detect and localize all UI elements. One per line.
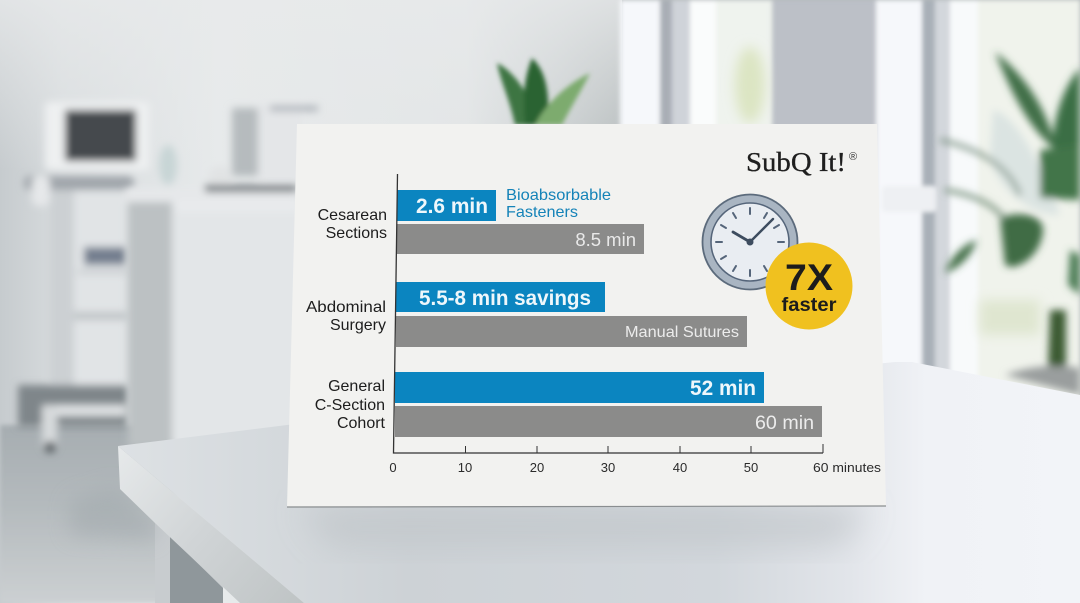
window greenery bbox=[735, 47, 1040, 335]
axis labels: 50 bbox=[744, 460, 758, 475]
axis labels: 60 minutes bbox=[813, 460, 882, 475]
axis labels: 40 bbox=[673, 460, 687, 475]
gray bar manual sutures: Manual Sutures bbox=[625, 324, 739, 341]
category label: General bbox=[328, 378, 385, 395]
gray bar 60 min bbox=[395, 406, 822, 437]
back plant bbox=[497, 58, 590, 125]
badge: 7X faster: faster bbox=[782, 295, 837, 316]
blue bar 2.6 min bbox=[397, 190, 496, 221]
table front edge bbox=[118, 446, 304, 603]
table top bbox=[118, 362, 1080, 603]
category label: Surgery bbox=[330, 317, 386, 334]
blue bar savings bbox=[396, 282, 605, 312]
axis labels bbox=[389, 460, 882, 475]
brand logo: SubQ It!: SubQ It! bbox=[746, 147, 846, 177]
axes bbox=[389, 174, 882, 475]
gray bar manual sutures bbox=[396, 316, 747, 347]
blue bar 2.6 min: 2.6 min bbox=[416, 195, 488, 218]
badge: 7X faster: 7X bbox=[785, 257, 833, 298]
row: Cesarean Sections bbox=[318, 187, 644, 254]
card panel bbox=[287, 124, 886, 507]
category label: Abdominal bbox=[306, 299, 386, 316]
legend label: Fasteners bbox=[506, 204, 578, 221]
category label: C-Section bbox=[315, 397, 385, 414]
right plant bbox=[940, 52, 1080, 395]
badge: 7X faster bbox=[766, 242, 852, 330]
shadow under card bbox=[300, 508, 870, 545]
category label: Sections bbox=[326, 225, 387, 242]
bar chart bbox=[306, 174, 882, 475]
category label: Cohort bbox=[337, 415, 386, 432]
axis labels: 10 bbox=[458, 460, 472, 475]
category label: Cesarean bbox=[318, 207, 387, 224]
axis labels: 0 bbox=[389, 460, 397, 475]
axis labels: 30 bbox=[601, 460, 615, 475]
row: General C-Section Cohort bbox=[315, 372, 822, 437]
cabinet bbox=[126, 104, 318, 447]
blue bar savings: 5.5-8 min savings bbox=[419, 287, 591, 310]
axis labels: 20 bbox=[530, 460, 544, 475]
gray bar 60 min: 60 min bbox=[755, 413, 814, 434]
blue bar 52 min bbox=[395, 372, 764, 403]
window wall bbox=[620, 0, 1080, 400]
blue bar 52 min: 52 min bbox=[690, 377, 756, 400]
brand logo: SubQ It!: ® bbox=[849, 151, 857, 163]
legend label: Bioabsorbable bbox=[506, 187, 611, 204]
medical cart bbox=[18, 102, 149, 453]
table leg bbox=[155, 510, 223, 603]
white table bbox=[70, 362, 1080, 603]
gray bar 8.5 min bbox=[397, 224, 644, 254]
shadow under table bbox=[70, 486, 155, 540]
gray bar 8.5 min: 8.5 min bbox=[575, 229, 636, 250]
row: Abdominal Surgery bbox=[306, 282, 747, 347]
icon: clock bbox=[702, 194, 798, 290]
